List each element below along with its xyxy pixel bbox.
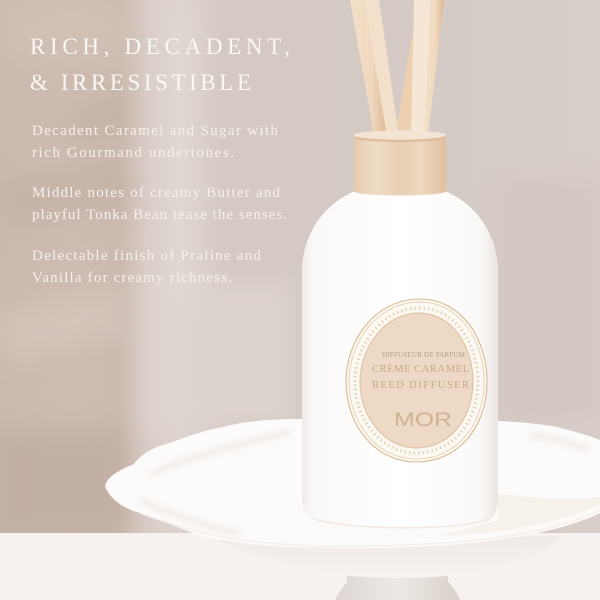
reed 3 [398,34,414,136]
text block: top notes: rich Gourmand undertones. [32,145,234,161]
plate well shade [440,493,600,536]
text block: base notes: Vanilla for creamy richness. [32,270,232,286]
bottle [302,130,498,528]
plate underside [217,536,563,578]
label text: DIFFUSEUR DE PARFUM [382,351,466,359]
bottle base shadow line [312,518,490,528]
plate front edge [140,510,600,546]
reeds [350,0,444,136]
bottle cap [354,130,446,196]
text block: middle notes [32,185,287,223]
text block: top notes [32,123,278,161]
reed 2 [364,0,399,136]
embossed rim detail [140,432,590,534]
reed 4 [411,0,431,136]
title: RICH, DECADENT, [30,34,290,59]
bottle body [302,190,498,528]
title: & IRRESISTIBLE [30,70,251,95]
reed 5 [424,0,444,136]
text block: middle notes: Middle notes of creamy Butter and [32,185,280,201]
text block: middle notes: playful Tonka Bean tease the senses. [32,207,287,223]
label: CRÈME CARAMEL [372,363,469,375]
label [346,299,487,462]
title [30,34,290,95]
label: MOR [394,410,452,431]
stand foot [335,565,460,600]
cake stand [105,419,600,600]
label: REED DIFFUSER [372,380,469,391]
text block: base notes: Delectable finish of Praline and [32,248,262,264]
text block: base notes [32,248,262,286]
text block: top notes: Decadent Caramel and Sugar with [32,123,278,139]
reed 1 [350,0,387,136]
table surface [0,533,600,600]
plate rim and surface [105,419,600,548]
